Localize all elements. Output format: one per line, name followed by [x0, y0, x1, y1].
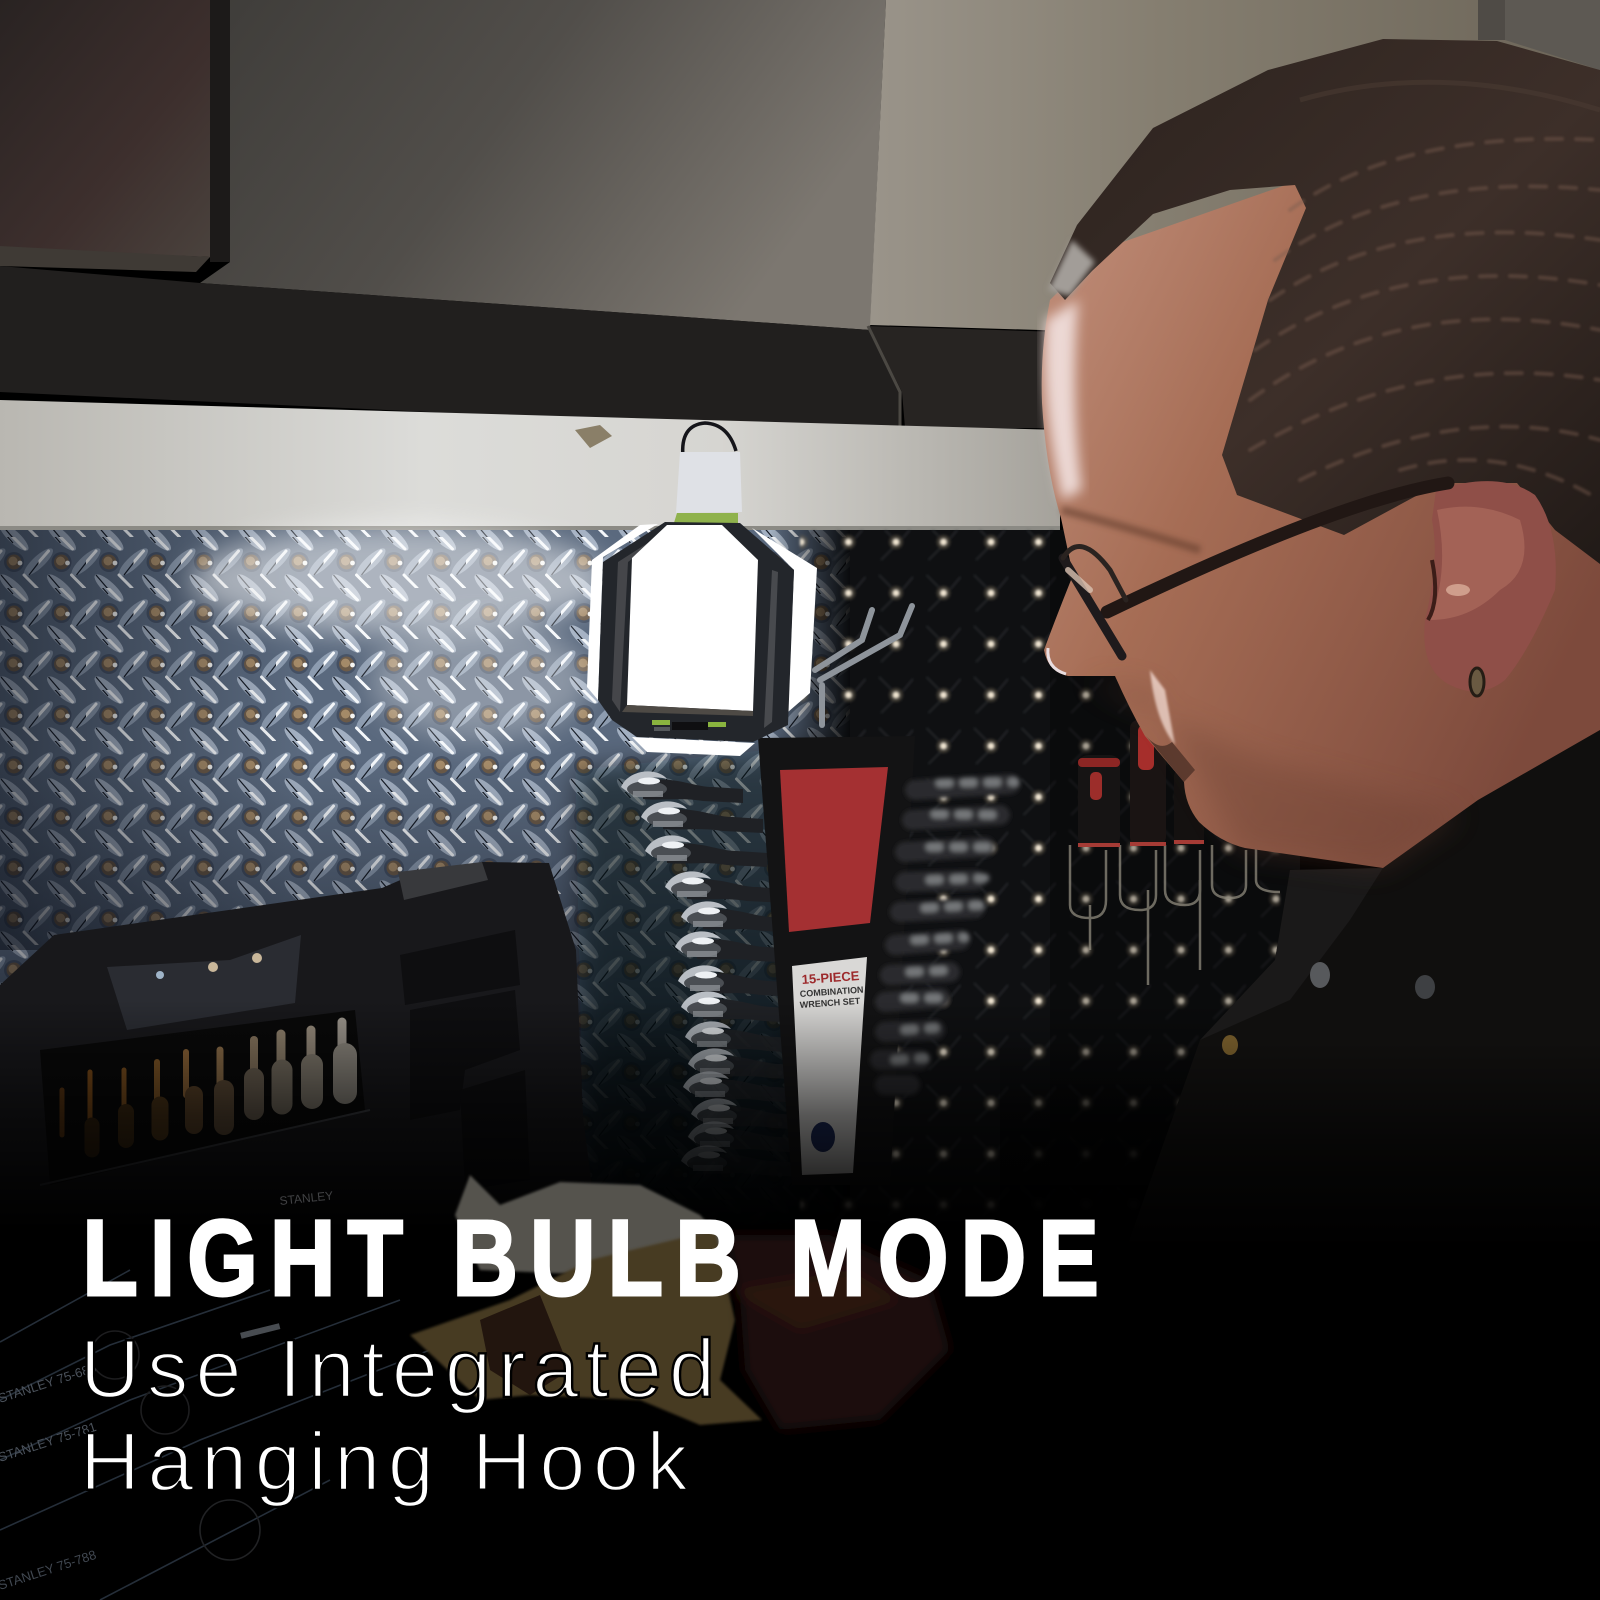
bottom light panel — [632, 737, 755, 756]
right side light panel — [752, 528, 817, 712]
glasses — [1063, 483, 1448, 656]
icon: wire hook — [683, 423, 736, 457]
lantern — [587, 423, 817, 756]
man: jacket — [1000, 730, 1600, 1600]
wrench chain right — [880, 782, 1015, 1085]
control buttons — [652, 720, 670, 725]
socket tray lines bottom left: STANLEY — [279, 1188, 334, 1208]
upper cabinets — [0, 0, 1600, 350]
fade to black — [0, 1000, 1600, 1230]
screwdrivers — [1070, 720, 1280, 985]
metal peg hook — [815, 606, 912, 725]
green collar — [673, 513, 738, 530]
diamond plate pegboard — [0, 525, 1310, 1240]
subtitle: Hanging Hook — [80, 1415, 688, 1508]
wrench set package: WRENCH SET — [799, 996, 861, 1010]
wrench set package: COMBINATION — [799, 985, 864, 999]
left side light panel — [587, 524, 658, 700]
wrench set package — [758, 736, 915, 1185]
sockets row — [62, 1022, 345, 1150]
white wall band — [0, 400, 1060, 531]
socket case — [0, 862, 600, 1250]
subtitle — [80, 1322, 715, 1508]
lantern frame — [598, 522, 794, 742]
shop rag and glove — [410, 1175, 762, 1425]
main light panel — [627, 525, 758, 711]
title: LIGHT BULB MODE — [82, 1199, 1099, 1319]
man: ear — [1424, 481, 1556, 691]
dark ledge under cabinets — [0, 266, 1060, 428]
man: face — [1042, 180, 1600, 868]
hands in shadow — [725, 1235, 950, 1430]
earring — [1470, 668, 1484, 696]
subtitle: Use Integrated — [80, 1322, 715, 1415]
socket tray lines bottom left — [0, 1188, 430, 1600]
lantern cap — [676, 452, 742, 513]
wrench set package: 15-PIECE — [801, 968, 860, 987]
man: hair — [1048, 39, 1600, 564]
wrench chain left — [621, 771, 813, 1177]
